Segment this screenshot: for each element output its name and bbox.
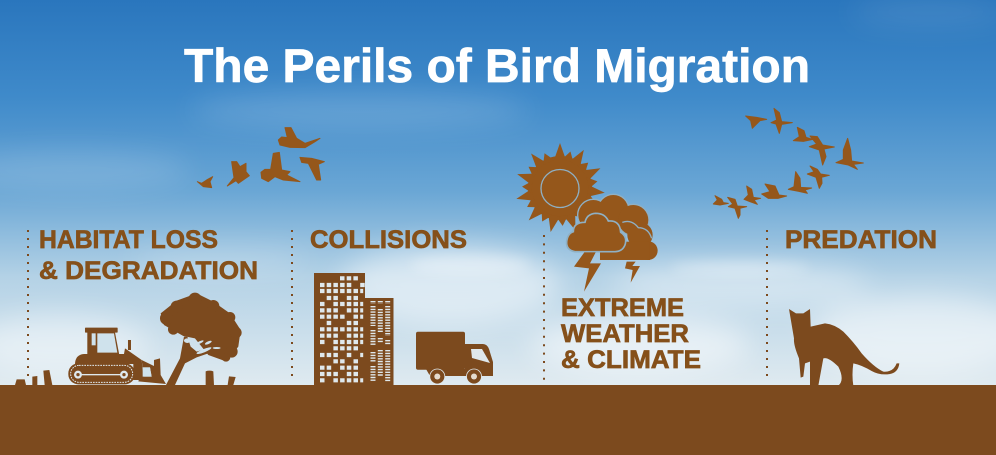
heading: collisions: COLLISIONS (310, 226, 467, 254)
icon: flock of birds right (713, 108, 863, 218)
heading: habitat loss and degradation: HABITAT LOSS (39, 226, 218, 254)
heading: habitat loss and degradation (39, 226, 258, 285)
icon: flock of birds left (197, 128, 324, 188)
heading: extreme weather and climate: WEATHER (561, 320, 689, 348)
icon: cat (789, 309, 899, 386)
icon: delivery truck (416, 332, 493, 384)
title: The Perils of Bird Migration (184, 39, 810, 92)
dotted divider: predation (766, 230, 768, 382)
heading: predation: PREDATION (785, 226, 937, 254)
dotted divider: extreme weather (543, 235, 545, 382)
heading: habitat loss and degradation: & DEGRADATION (39, 257, 258, 285)
icon: sun (515, 143, 605, 233)
heading: extreme weather and climate: & CLIMATE (561, 346, 701, 374)
dotted divider: collisions (291, 230, 293, 382)
heading: extreme weather and climate: EXTREME (561, 294, 684, 322)
icon: tree (160, 293, 242, 385)
icon: tree stumps (15, 370, 236, 385)
icon: bulldozer (68, 328, 166, 384)
ground (0, 385, 996, 455)
heading: extreme weather and climate (561, 294, 701, 374)
icon: tall buildings (314, 273, 394, 385)
dotted divider: habitat loss (27, 230, 29, 382)
icon: storm clouds (567, 195, 658, 292)
